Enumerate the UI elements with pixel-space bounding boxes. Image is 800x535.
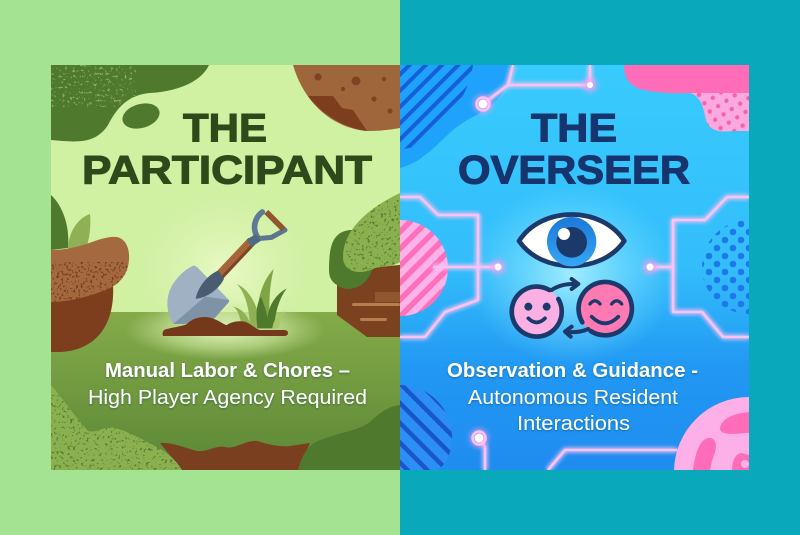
decor: top-left blue blob with stripes [400, 65, 515, 168]
caption: participant: Manual Labor & Chores – [105, 360, 350, 382]
title: the participant [84, 114, 372, 184]
icon: left smiling face [512, 287, 562, 337]
icon: eye [519, 214, 624, 266]
blade [167, 266, 229, 324]
illustration: soil mound [162, 317, 288, 336]
caption: participant [88, 360, 367, 409]
decor: top-left dark green blob [51, 65, 209, 141]
panel: the participant [51, 65, 400, 470]
caption: overseer [447, 360, 698, 435]
title: the overseer: THE [531, 106, 617, 150]
panel background: blue gradient [400, 65, 749, 470]
circuit lines with glowing nodes [400, 65, 749, 470]
decor: right blue dot circle [702, 220, 749, 314]
background: right teal half [400, 0, 800, 535]
caption: overseer: Observation & Guidance - [447, 360, 698, 382]
arrow: left to right [552, 279, 578, 290]
icon: right happy face [578, 282, 632, 335]
socket [196, 271, 224, 299]
decor: left striped pink circle [400, 220, 448, 316]
decor: bottom-right pink blob [674, 397, 749, 470]
title: the overseer: OVERSEER [458, 148, 690, 192]
D-handle grip [249, 212, 285, 243]
glow behind eye and faces [482, 195, 666, 357]
decor: top-right soil mound [293, 65, 400, 131]
glow under soil [132, 312, 318, 358]
decor: top-right pink blob with dots [624, 65, 749, 131]
decor: left leaves and soil [51, 195, 131, 352]
icon: eye and interacting faces [512, 214, 632, 337]
decor: bottom-left striped circle [400, 385, 452, 470]
arrow: right to left [565, 327, 588, 337]
shaft [218, 241, 254, 279]
grass [232, 269, 287, 328]
background: left green half [0, 0, 400, 535]
caption: overseer: Interactions [517, 413, 630, 435]
decor: bottom-left green blob [51, 385, 182, 470]
ground band [51, 312, 400, 470]
caption: participant: High Player Agency Required [88, 387, 367, 409]
decor: bottom-right green blob [298, 405, 400, 470]
decor: bottom soil strip [160, 441, 310, 470]
glow behind shovel [166, 218, 284, 322]
circuit nodes [470, 78, 657, 447]
decor: right bush and soil [329, 193, 400, 337]
title: the participant: THE [183, 106, 267, 150]
illustration: shovel in soil with grass [167, 212, 287, 328]
panel background: pale green sky [51, 65, 400, 313]
panel: the overseer [400, 65, 749, 470]
title: the participant: PARTICIPANT [82, 148, 372, 192]
title: the overseer [459, 114, 690, 184]
decor: green oval [122, 103, 160, 129]
caption: overseer: Autonomous Resident [468, 387, 678, 409]
